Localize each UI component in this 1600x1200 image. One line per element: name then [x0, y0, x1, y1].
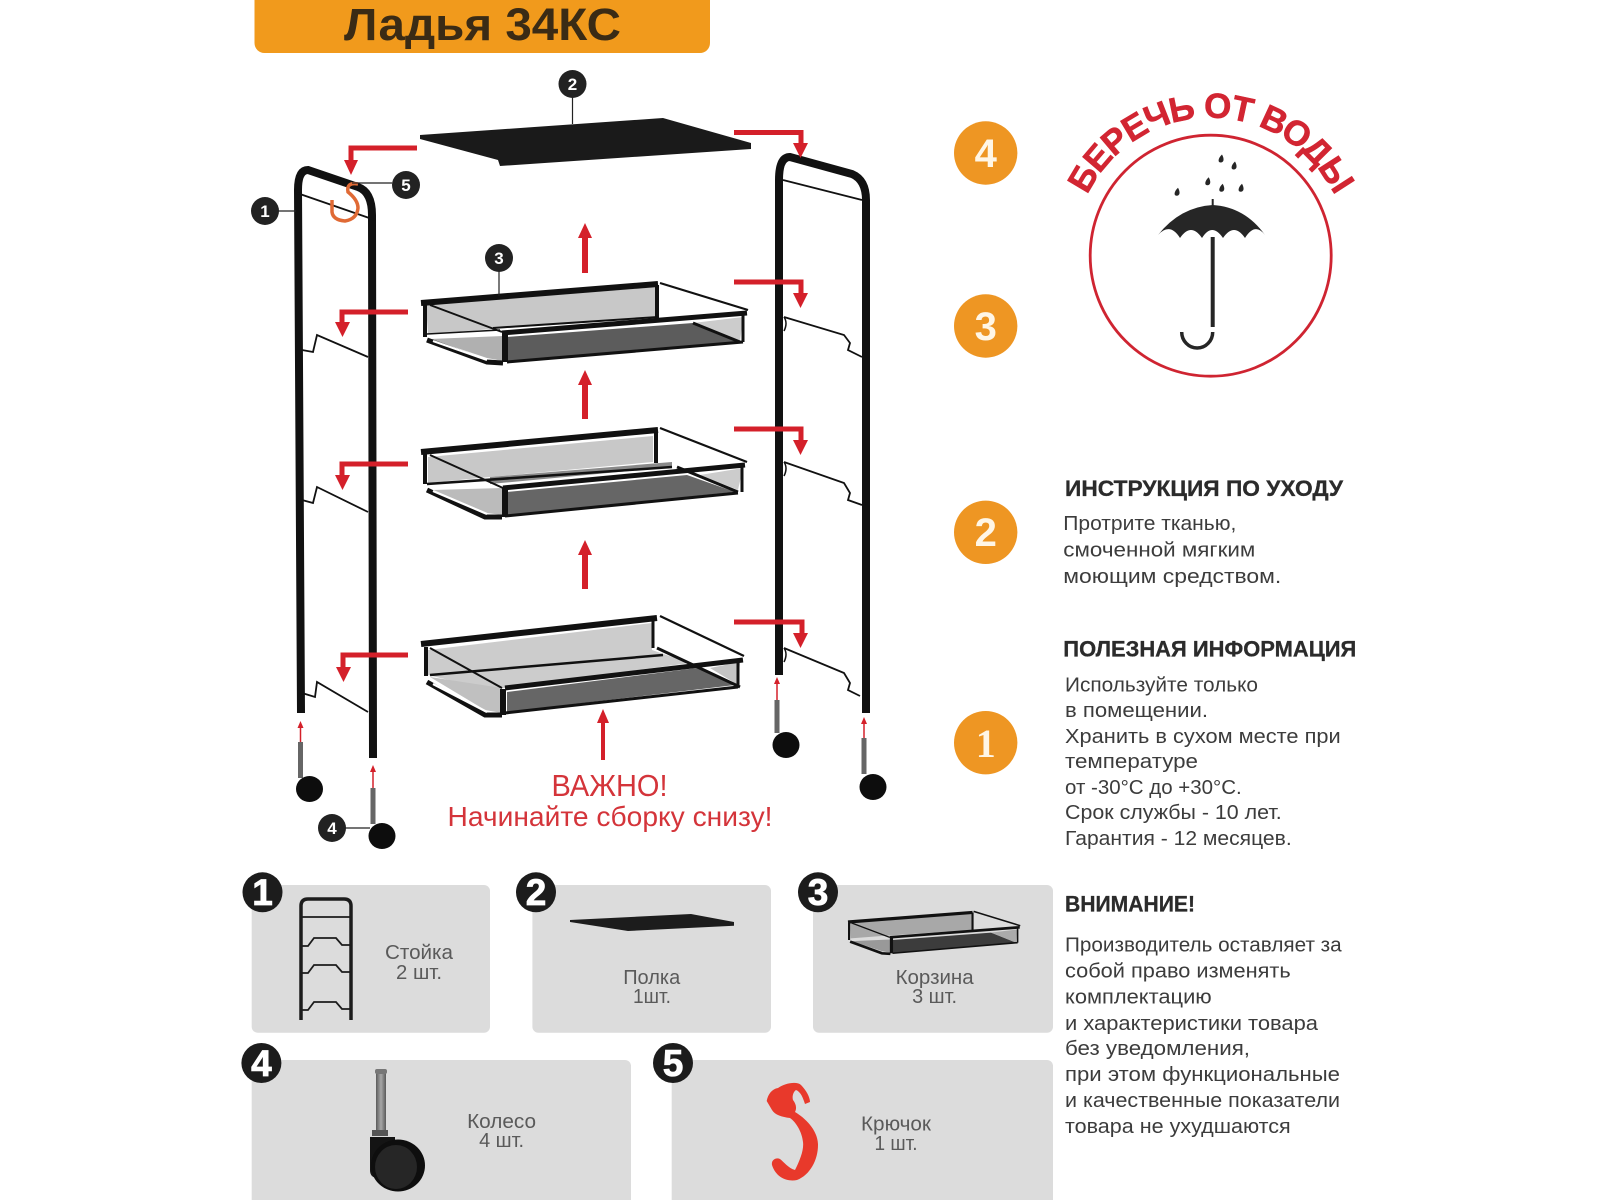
attention notice: комплектацию: [1065, 986, 1212, 1008]
badge 4: 4: [251, 1043, 272, 1084]
badge 2: [516, 872, 556, 913]
wheel assembly rear left: [772, 677, 800, 758]
label: 1шт.: [633, 986, 671, 1008]
attention notice: и характеристики товара: [1065, 1013, 1319, 1035]
useful information: Гарантия - 12 месяцев.: [1065, 828, 1292, 850]
icon: hook: [767, 1083, 818, 1180]
arrow: up 3: [578, 540, 592, 589]
attention notice: собой право изменять: [1065, 961, 1291, 983]
attention notice: при этом функциональные: [1065, 1064, 1340, 1086]
callout badge 4: [318, 814, 370, 842]
step marker 2: 2: [975, 511, 997, 555]
panel: part 5 hook: [653, 1043, 1053, 1200]
label: [385, 942, 454, 984]
wheel assembly front left: [296, 721, 323, 802]
label: [861, 1114, 931, 1155]
badge 5: [653, 1043, 693, 1084]
step marker 4: [954, 121, 1017, 185]
callout badge 5: 5: [401, 176, 411, 195]
useful information: в помещении.: [1065, 700, 1208, 722]
arrow: basket 2 left: [335, 464, 408, 490]
useful information: температуре: [1065, 751, 1198, 773]
badge 5: 5: [663, 1043, 683, 1084]
callout badge 2: 2: [568, 75, 577, 94]
label: Полка: [623, 967, 681, 989]
arrow: top right: [734, 132, 808, 158]
attention notice: ВНИМАНИЕ!: [1065, 892, 1195, 917]
panel: part 4 wheel: [241, 1043, 631, 1200]
attention notice: товара не ухудшаются: [1065, 1116, 1291, 1138]
callout badge 2: [558, 70, 586, 124]
arrow: basket 3 right: [734, 622, 808, 648]
keep away from water symbol: БЕРЕЧЬ ОТ ВОДЫ: [1067, 93, 1355, 194]
panel: part 2 shelf: [516, 872, 771, 1033]
attention notice: Производитель оставляет за: [1065, 935, 1343, 957]
important note: ВАЖНО!: [552, 768, 668, 803]
label: Корзина: [896, 967, 974, 989]
care instructions: [1063, 476, 1343, 588]
attention notice: и качественные показатели: [1065, 1090, 1340, 1112]
basket 2: [421, 428, 747, 517]
right rack frame: [779, 157, 866, 713]
badge 1: [242, 872, 282, 913]
callout badge 3: [485, 244, 513, 296]
basket 1: [421, 283, 748, 363]
wheel assembly front middle: [368, 765, 396, 849]
panel: part 3 basket: [798, 872, 1053, 1033]
label: 4 шт.: [479, 1130, 524, 1152]
step marker 3: [954, 294, 1017, 358]
left rack frame: [297, 170, 375, 758]
useful information: ПОЛЕЗНАЯ ИНФОРМАЦИЯ: [1063, 637, 1356, 662]
important note: [448, 768, 772, 832]
wheel assembly rear right: [860, 717, 886, 800]
callout badge 1: 1: [260, 202, 270, 221]
label: 1 шт.: [874, 1133, 918, 1155]
callout badge 4: 4: [327, 819, 337, 838]
title banner: Ладья 34КС: [344, 0, 621, 50]
arrow: basket 3 left: [336, 655, 408, 682]
arrow: up 4: [597, 709, 609, 760]
step marker 4: 4: [975, 132, 998, 176]
label: 2 шт.: [396, 962, 442, 984]
badge 1: 1: [252, 872, 273, 913]
keep away from water symbol: [1067, 93, 1355, 378]
care instructions: моющим средством.: [1063, 566, 1281, 588]
arrow: up 2: [578, 370, 592, 419]
hook on frame: [332, 184, 358, 221]
badge 3: 3: [808, 872, 828, 913]
callout badge 3: 3: [494, 249, 504, 268]
icon: caster wheel: [370, 1069, 425, 1192]
step marker 1: 1: [976, 721, 996, 766]
badge 4: [241, 1043, 281, 1084]
arrow: basket 2 right: [734, 429, 808, 455]
icon: basket: [848, 911, 1020, 954]
label: [623, 967, 681, 1008]
callout badge 1: [251, 197, 296, 225]
icon: upright frame: [301, 899, 351, 1020]
step marker 1: [954, 711, 1017, 774]
basket 3: [421, 616, 744, 715]
label: Крючок: [861, 1114, 931, 1136]
care instructions: ИНСТРУКЦИЯ ПО УХОДУ: [1065, 476, 1343, 501]
care instructions: Протрите тканью,: [1063, 513, 1236, 535]
label: Стойка: [385, 942, 454, 964]
attention notice: без уведомления,: [1065, 1038, 1250, 1060]
title banner: [254, 0, 710, 53]
arrow: basket 1 left: [335, 312, 408, 337]
label: [467, 1111, 536, 1152]
arrow: basket 1 right: [734, 282, 808, 308]
useful information: Хранить в сухом месте при: [1065, 726, 1341, 748]
useful information: Используйте только: [1065, 675, 1258, 697]
arrow: up 1: [578, 223, 592, 273]
step marker 3: 3: [975, 305, 997, 349]
useful information: Срок службы - 10 лет.: [1065, 802, 1282, 824]
icon: shelf: [570, 914, 734, 931]
icon: umbrella: [1158, 199, 1265, 348]
badge 3: [798, 872, 838, 913]
top shelf: [420, 118, 751, 166]
callout badge 5: [352, 171, 420, 199]
label: Колесо: [467, 1111, 536, 1133]
label: 3 шт.: [912, 986, 957, 1008]
important note: Начинайте сборку снизу!: [448, 801, 772, 832]
panel: part 1 upright: [242, 872, 490, 1033]
useful information: от -30°С до +30°С.: [1065, 777, 1242, 799]
badge 2: 2: [526, 872, 546, 913]
arrow: top left: [344, 148, 417, 175]
icon: rain drops: [1175, 154, 1244, 196]
useful information: [1063, 637, 1356, 850]
label: [896, 967, 974, 1008]
care instructions: смоченной мягким: [1063, 540, 1255, 562]
attention notice: [1065, 892, 1343, 1138]
step marker 2: [954, 501, 1017, 564]
